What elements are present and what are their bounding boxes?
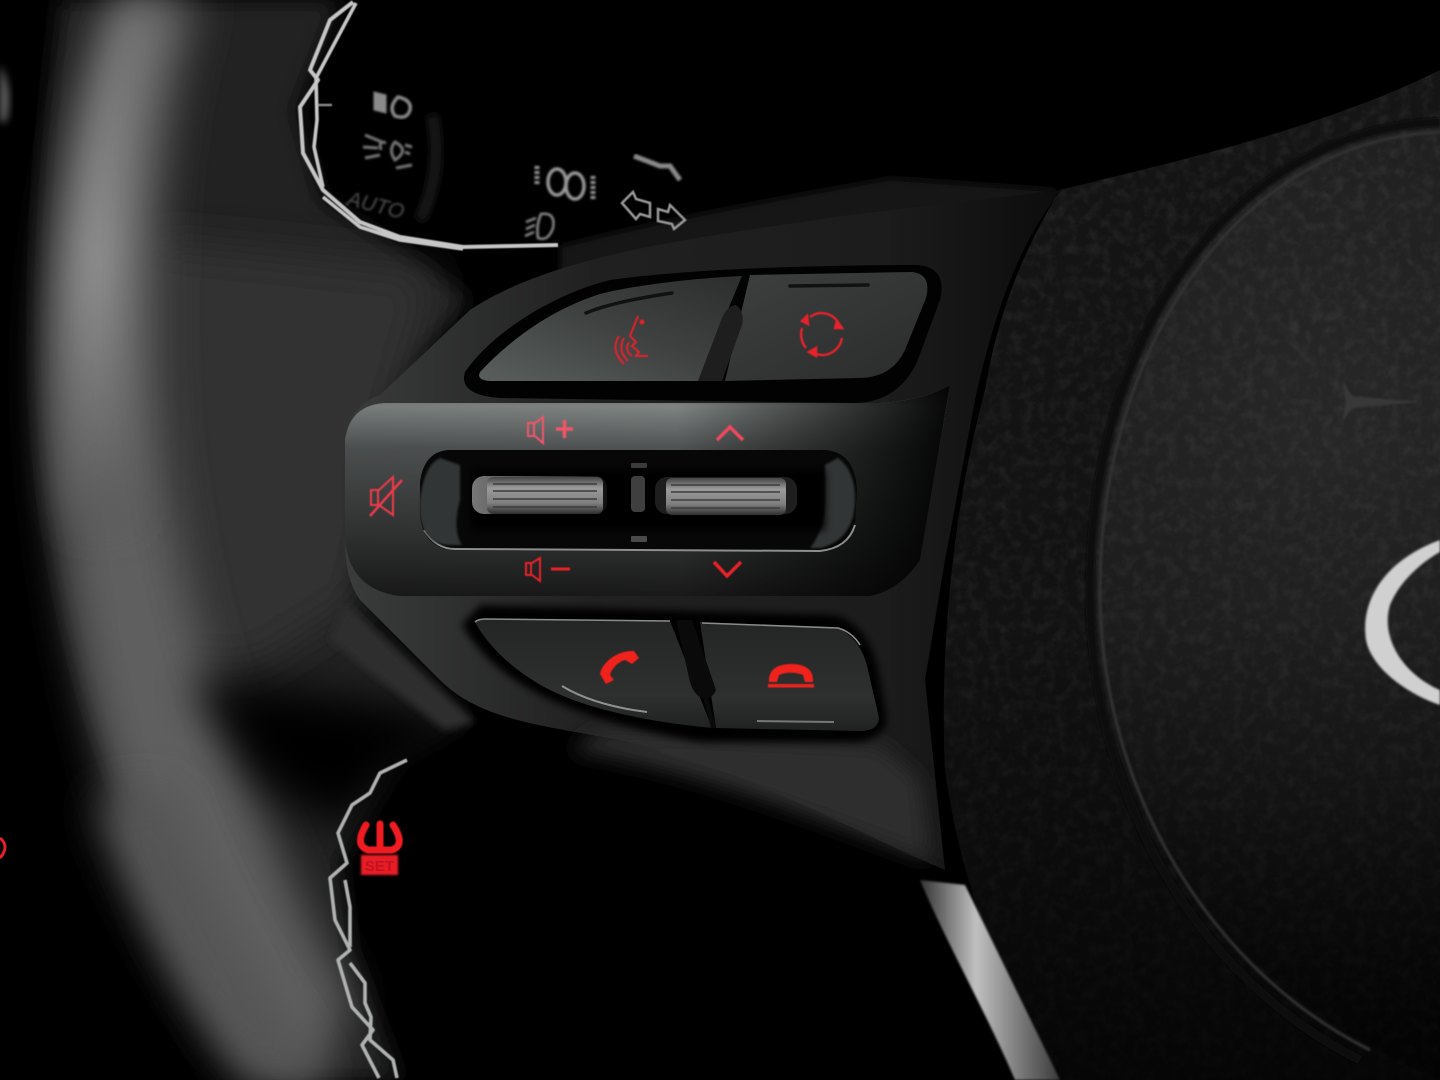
control slot xyxy=(420,450,857,552)
icon: call xyxy=(600,651,639,684)
top edge highlight xyxy=(475,619,860,645)
icon: turn arrows xyxy=(622,192,685,229)
bottom button group xyxy=(462,605,886,742)
label: SET: SET xyxy=(365,858,394,875)
upper shroud xyxy=(560,178,1060,290)
control panel body xyxy=(330,190,1062,870)
indent: end xyxy=(757,721,834,722)
icon: volume down xyxy=(526,558,570,581)
top button group xyxy=(464,265,942,403)
indent: voice xyxy=(586,293,672,313)
icon: up chevron xyxy=(717,427,743,440)
upper stalk xyxy=(343,90,520,224)
left edge highlight xyxy=(0,65,9,122)
icon: mute xyxy=(370,477,402,516)
mode button xyxy=(725,272,927,381)
icon: parking lamps xyxy=(363,135,412,168)
lower edge highlight xyxy=(330,760,407,1078)
call button xyxy=(475,619,712,728)
left scroll wheel xyxy=(472,476,607,514)
end call button xyxy=(700,622,879,731)
label: AUTO: AUTO xyxy=(343,187,407,224)
icon: mode cycle xyxy=(801,313,842,356)
left edge red mark xyxy=(0,838,5,858)
steering wheel rim xyxy=(37,0,480,1080)
hub star mark xyxy=(1342,380,1420,422)
button divider xyxy=(676,620,716,728)
voice button xyxy=(479,276,742,381)
icon: down chevron xyxy=(714,562,741,576)
upper edge highlight xyxy=(300,2,558,249)
icon: volume up xyxy=(528,417,573,443)
right scroll wheel xyxy=(655,477,797,515)
icon: fog lamp xyxy=(525,214,554,239)
hub emblem xyxy=(1365,540,1440,705)
indent: call xyxy=(562,686,647,712)
icon: wiper xyxy=(634,156,680,180)
icon: high beam xyxy=(537,166,593,200)
button divider xyxy=(698,305,743,381)
centre hub leather xyxy=(944,70,1440,1080)
panel centre band xyxy=(345,385,950,596)
centre pin xyxy=(631,463,647,542)
lower silver spoke xyxy=(920,880,1060,1080)
icon: headlamp xyxy=(374,92,410,117)
icon: end call xyxy=(768,664,814,688)
icon: voice xyxy=(615,316,648,364)
icon: tyre pressure SET xyxy=(360,824,399,875)
indent: mode xyxy=(790,285,868,286)
